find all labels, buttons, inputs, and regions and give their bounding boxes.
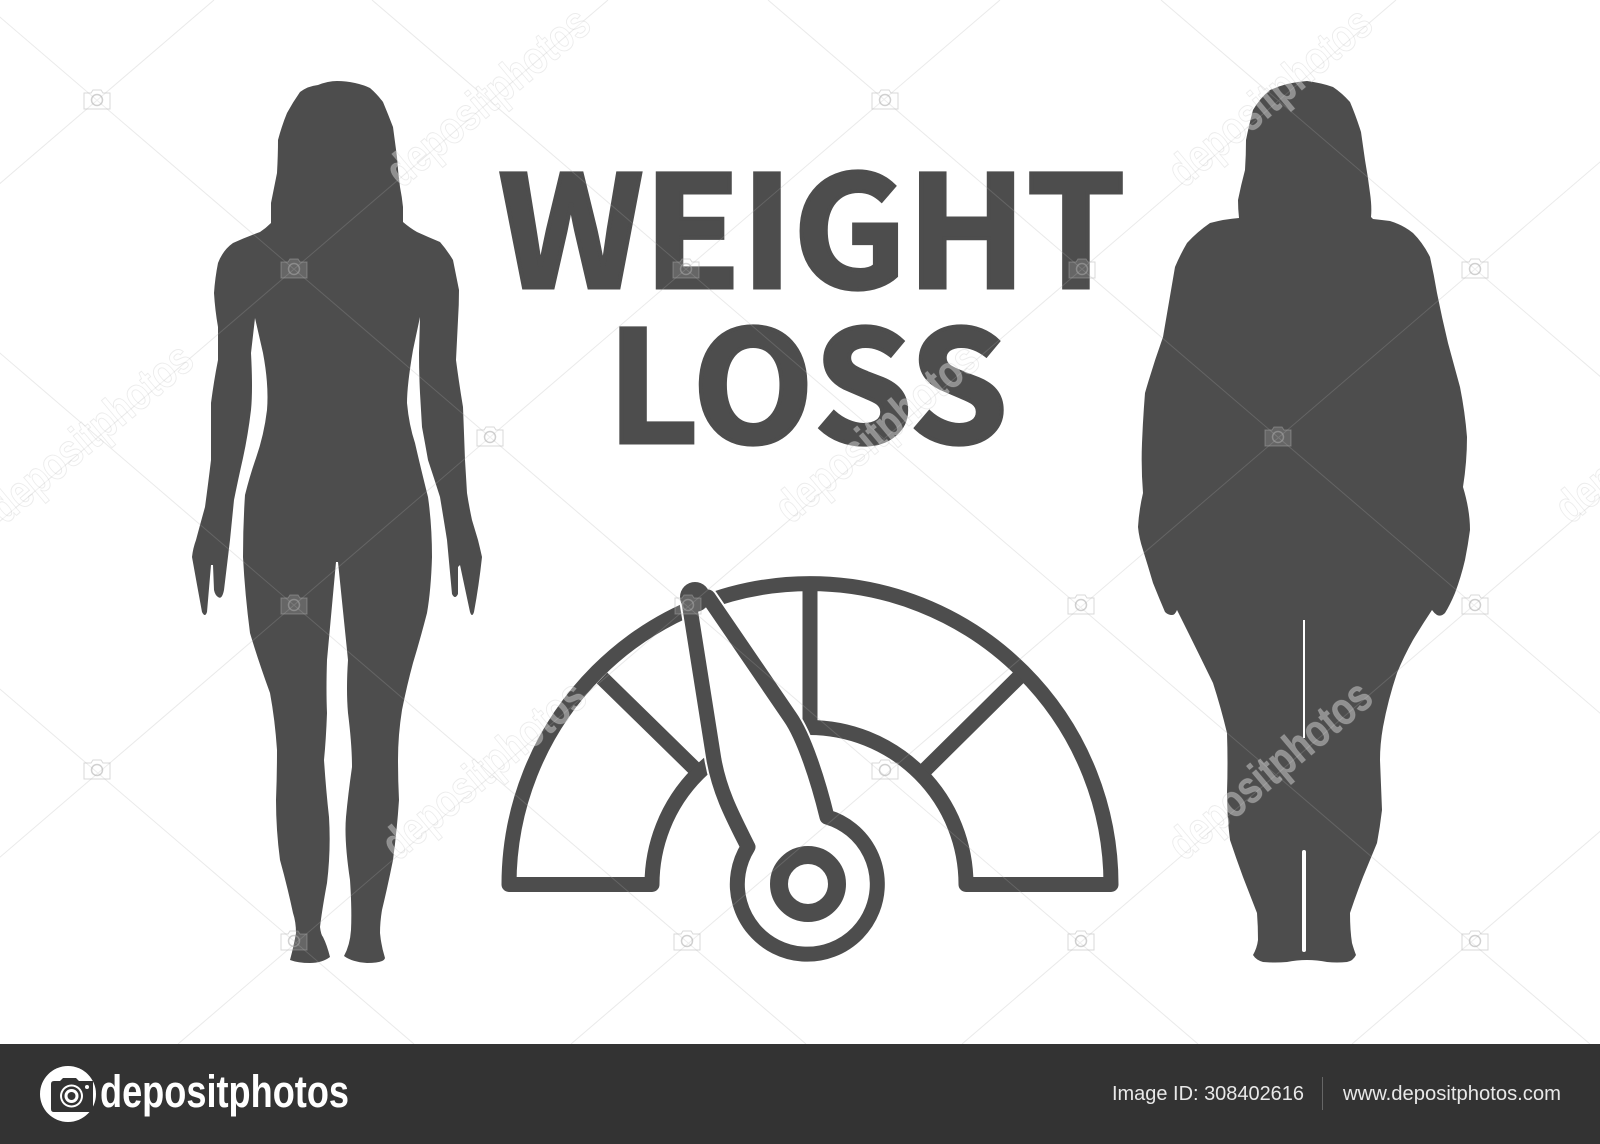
silhouette: slim woman [192, 81, 482, 963]
gap between calves [1302, 850, 1306, 952]
title line: LOSS: LOSS [607, 264, 1008, 488]
icon: weight gauge meter [509, 582, 1111, 954]
gauge arc band [509, 584, 1111, 884]
footer image id: Image ID: 308402616 [1112, 1083, 1304, 1105]
icon: footer camera logo [40, 1066, 96, 1122]
watermark pattern: depositphotos [1157, 669, 1382, 870]
gauge needle [680, 582, 877, 954]
watermark pattern: depositphotos [371, 669, 596, 870]
watermark pattern: depositphotos [764, 332, 989, 533]
gauge hub ring [779, 855, 837, 913]
footer website url: www.depositphotos.com [1342, 1083, 1561, 1105]
footer logo wordmark: depositphotos [100, 1066, 349, 1117]
gap between thighs [1303, 620, 1305, 738]
title [498, 110, 1126, 488]
gauge ticks [602, 584, 1019, 770]
footer bar [0, 1044, 1600, 1144]
silhouette: overweight woman [1138, 81, 1470, 962]
title line: WEIGHT: WEIGHT [498, 110, 1126, 332]
